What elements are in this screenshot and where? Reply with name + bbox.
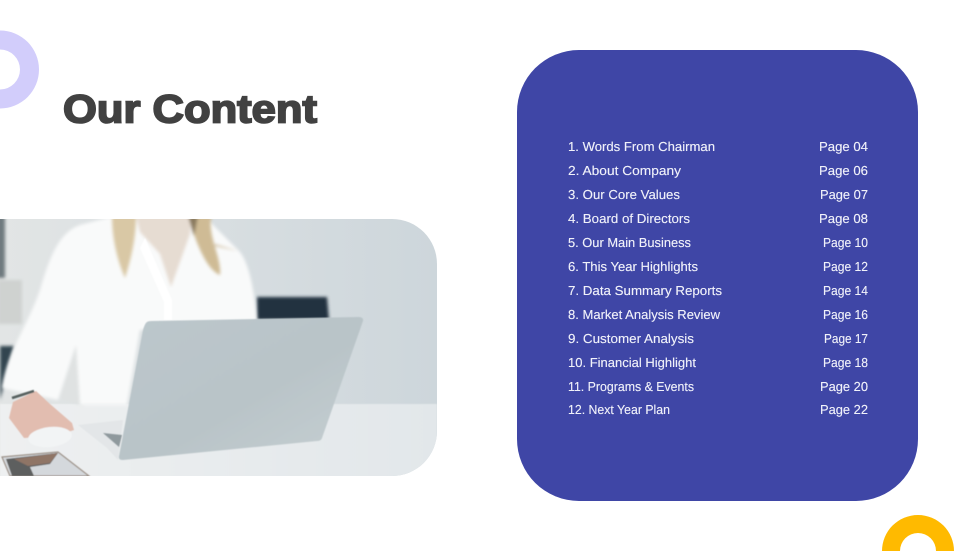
shirt: [2, 217, 257, 405]
contents page numbers: Page 07: [820, 187, 868, 202]
phone: [2, 452, 89, 476]
hand and watch: [2, 391, 89, 476]
contents page numbers: Page 04: [819, 139, 868, 154]
contents titles: [568, 139, 723, 417]
contents page numbers: Page 12: [823, 259, 868, 274]
contents page numbers: Page 20: [820, 379, 868, 394]
title: Our Content: [63, 88, 317, 132]
contents page numbers: Page 06: [819, 163, 868, 178]
hair and neck: [112, 216, 238, 287]
contents page numbers: [819, 139, 868, 417]
contents titles: 10. Financial Highlight: [568, 355, 696, 370]
arm shadow gap: [60, 335, 84, 406]
contents titles: 1. Words From Chairman: [568, 139, 715, 154]
contents page numbers: Page 14: [823, 283, 868, 298]
contents titles: 2. About Company: [568, 163, 682, 178]
contents titles: 7. Data Summary Reports: [568, 283, 723, 298]
placket detail: [144, 239, 146, 240]
contents titles: 11. Programs & Events: [568, 379, 694, 394]
mouse: [28, 426, 70, 438]
contents page numbers: Page 08: [819, 211, 868, 226]
background blur shapes: [0, 216, 329, 400]
contents page numbers: Page 10: [823, 235, 868, 250]
contents page numbers: Page 18: [823, 355, 868, 370]
contents page numbers: Page 17: [824, 331, 868, 346]
laptop keyboard base: [81, 424, 100, 440]
contents titles: 12. Next Year Plan: [568, 402, 670, 417]
photo: woman working at laptop: [0, 216, 437, 480]
contents titles: 3. Our Core Values: [568, 187, 681, 202]
table: [0, 404, 437, 480]
decorative ring: yellow: [882, 515, 954, 551]
contents titles: 5. Our Main Business: [568, 235, 691, 250]
contents titles: 4. Board of Directors: [568, 211, 691, 226]
laptop lid: [119, 317, 363, 460]
contents page numbers: Page 22: [820, 402, 868, 417]
contents titles: 6. This Year Highlights: [568, 259, 698, 274]
contents titles: 9. Customer Analysis: [568, 331, 695, 346]
contents titles: 8. Market Analysis Review: [568, 307, 721, 322]
decorative ring: lilac: [0, 30, 39, 108]
panel: contents list: [517, 50, 918, 501]
contents page numbers: Page 16: [823, 307, 868, 322]
